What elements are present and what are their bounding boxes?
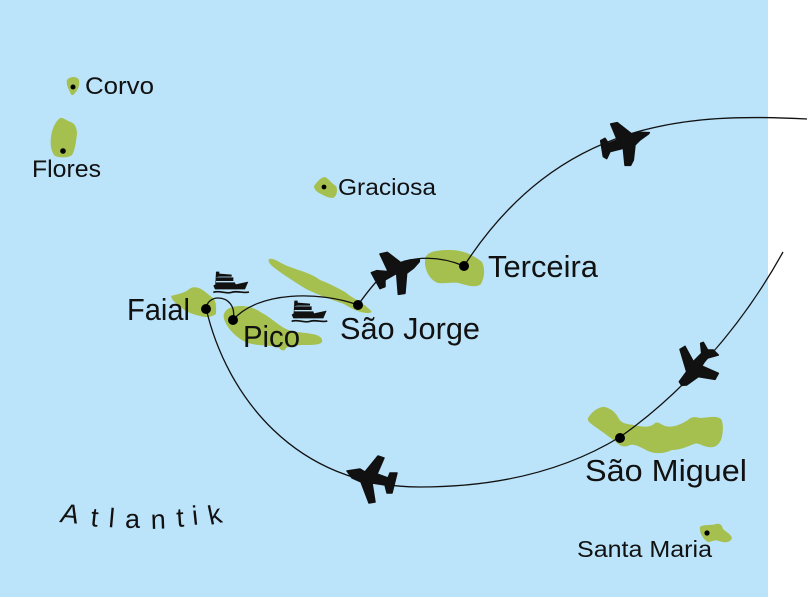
stop: Faial xyxy=(201,304,211,314)
island: Flores xyxy=(51,118,77,157)
label: São Miguel: São Miguel xyxy=(585,453,747,488)
label: Atlantik: k xyxy=(205,499,225,531)
route: Pico to Faial xyxy=(206,298,234,320)
label: São Jorge: São Jorge xyxy=(340,311,480,346)
icon: airplane to Faial xyxy=(347,456,397,503)
label: Atlantik: n xyxy=(150,504,166,535)
stop: Graciosa xyxy=(322,185,326,189)
icon: ferry Pico to São Jorge xyxy=(292,301,327,322)
island: São Miguel xyxy=(588,407,723,453)
island: Corvo xyxy=(67,77,79,95)
island: Terceira xyxy=(425,250,484,286)
route lines xyxy=(206,117,807,487)
label: Atlantik: l xyxy=(107,503,116,534)
route: Azores to Terceira xyxy=(464,117,807,266)
label: Atlantik: i xyxy=(190,501,200,531)
route: Faial to São Miguel xyxy=(206,308,620,487)
icon: airplane to São Jorge xyxy=(371,252,419,294)
label: Atlantik: t xyxy=(89,502,100,533)
label: Flores: Flores xyxy=(32,156,101,183)
island: Santa Maria xyxy=(700,524,732,542)
label: Terceira: Terceira xyxy=(488,249,599,284)
stop: Pico xyxy=(228,315,238,325)
island: Faial xyxy=(171,287,216,317)
route: Terceira to São Jorge xyxy=(358,258,464,305)
stop: Corvo xyxy=(70,84,76,90)
label: Atlantik xyxy=(57,498,225,535)
stop: Terceira xyxy=(459,261,469,271)
label: Atlantik: t xyxy=(175,503,185,533)
stop: Flores xyxy=(60,148,66,154)
island: Pico xyxy=(224,306,322,351)
icon: ferry Faial to Pico xyxy=(213,272,249,293)
label: Atlantik: a xyxy=(125,504,141,534)
stop: São Miguel xyxy=(615,433,625,443)
label: Santa Maria: Santa Maria xyxy=(577,536,712,562)
label: Corvo: Corvo xyxy=(85,73,154,100)
labels xyxy=(32,73,747,562)
label: Graciosa: Graciosa xyxy=(338,174,436,200)
route: São Miguel onward xyxy=(620,252,783,437)
stop: Santa Maria xyxy=(704,530,710,536)
icon: airplane to Terceira xyxy=(601,123,649,165)
stop: São Jorge xyxy=(353,300,363,310)
label: Faial: Faial xyxy=(127,292,190,327)
icon: airplane to São Miguel xyxy=(679,342,718,385)
label: Pico: Pico xyxy=(243,319,300,354)
island: Graciosa xyxy=(314,177,337,198)
island: São Jorge xyxy=(269,259,372,313)
route: São Jorge to Pico xyxy=(233,296,358,320)
label: Atlantik: A xyxy=(57,498,84,529)
route stops xyxy=(60,84,710,536)
islands xyxy=(51,77,732,542)
